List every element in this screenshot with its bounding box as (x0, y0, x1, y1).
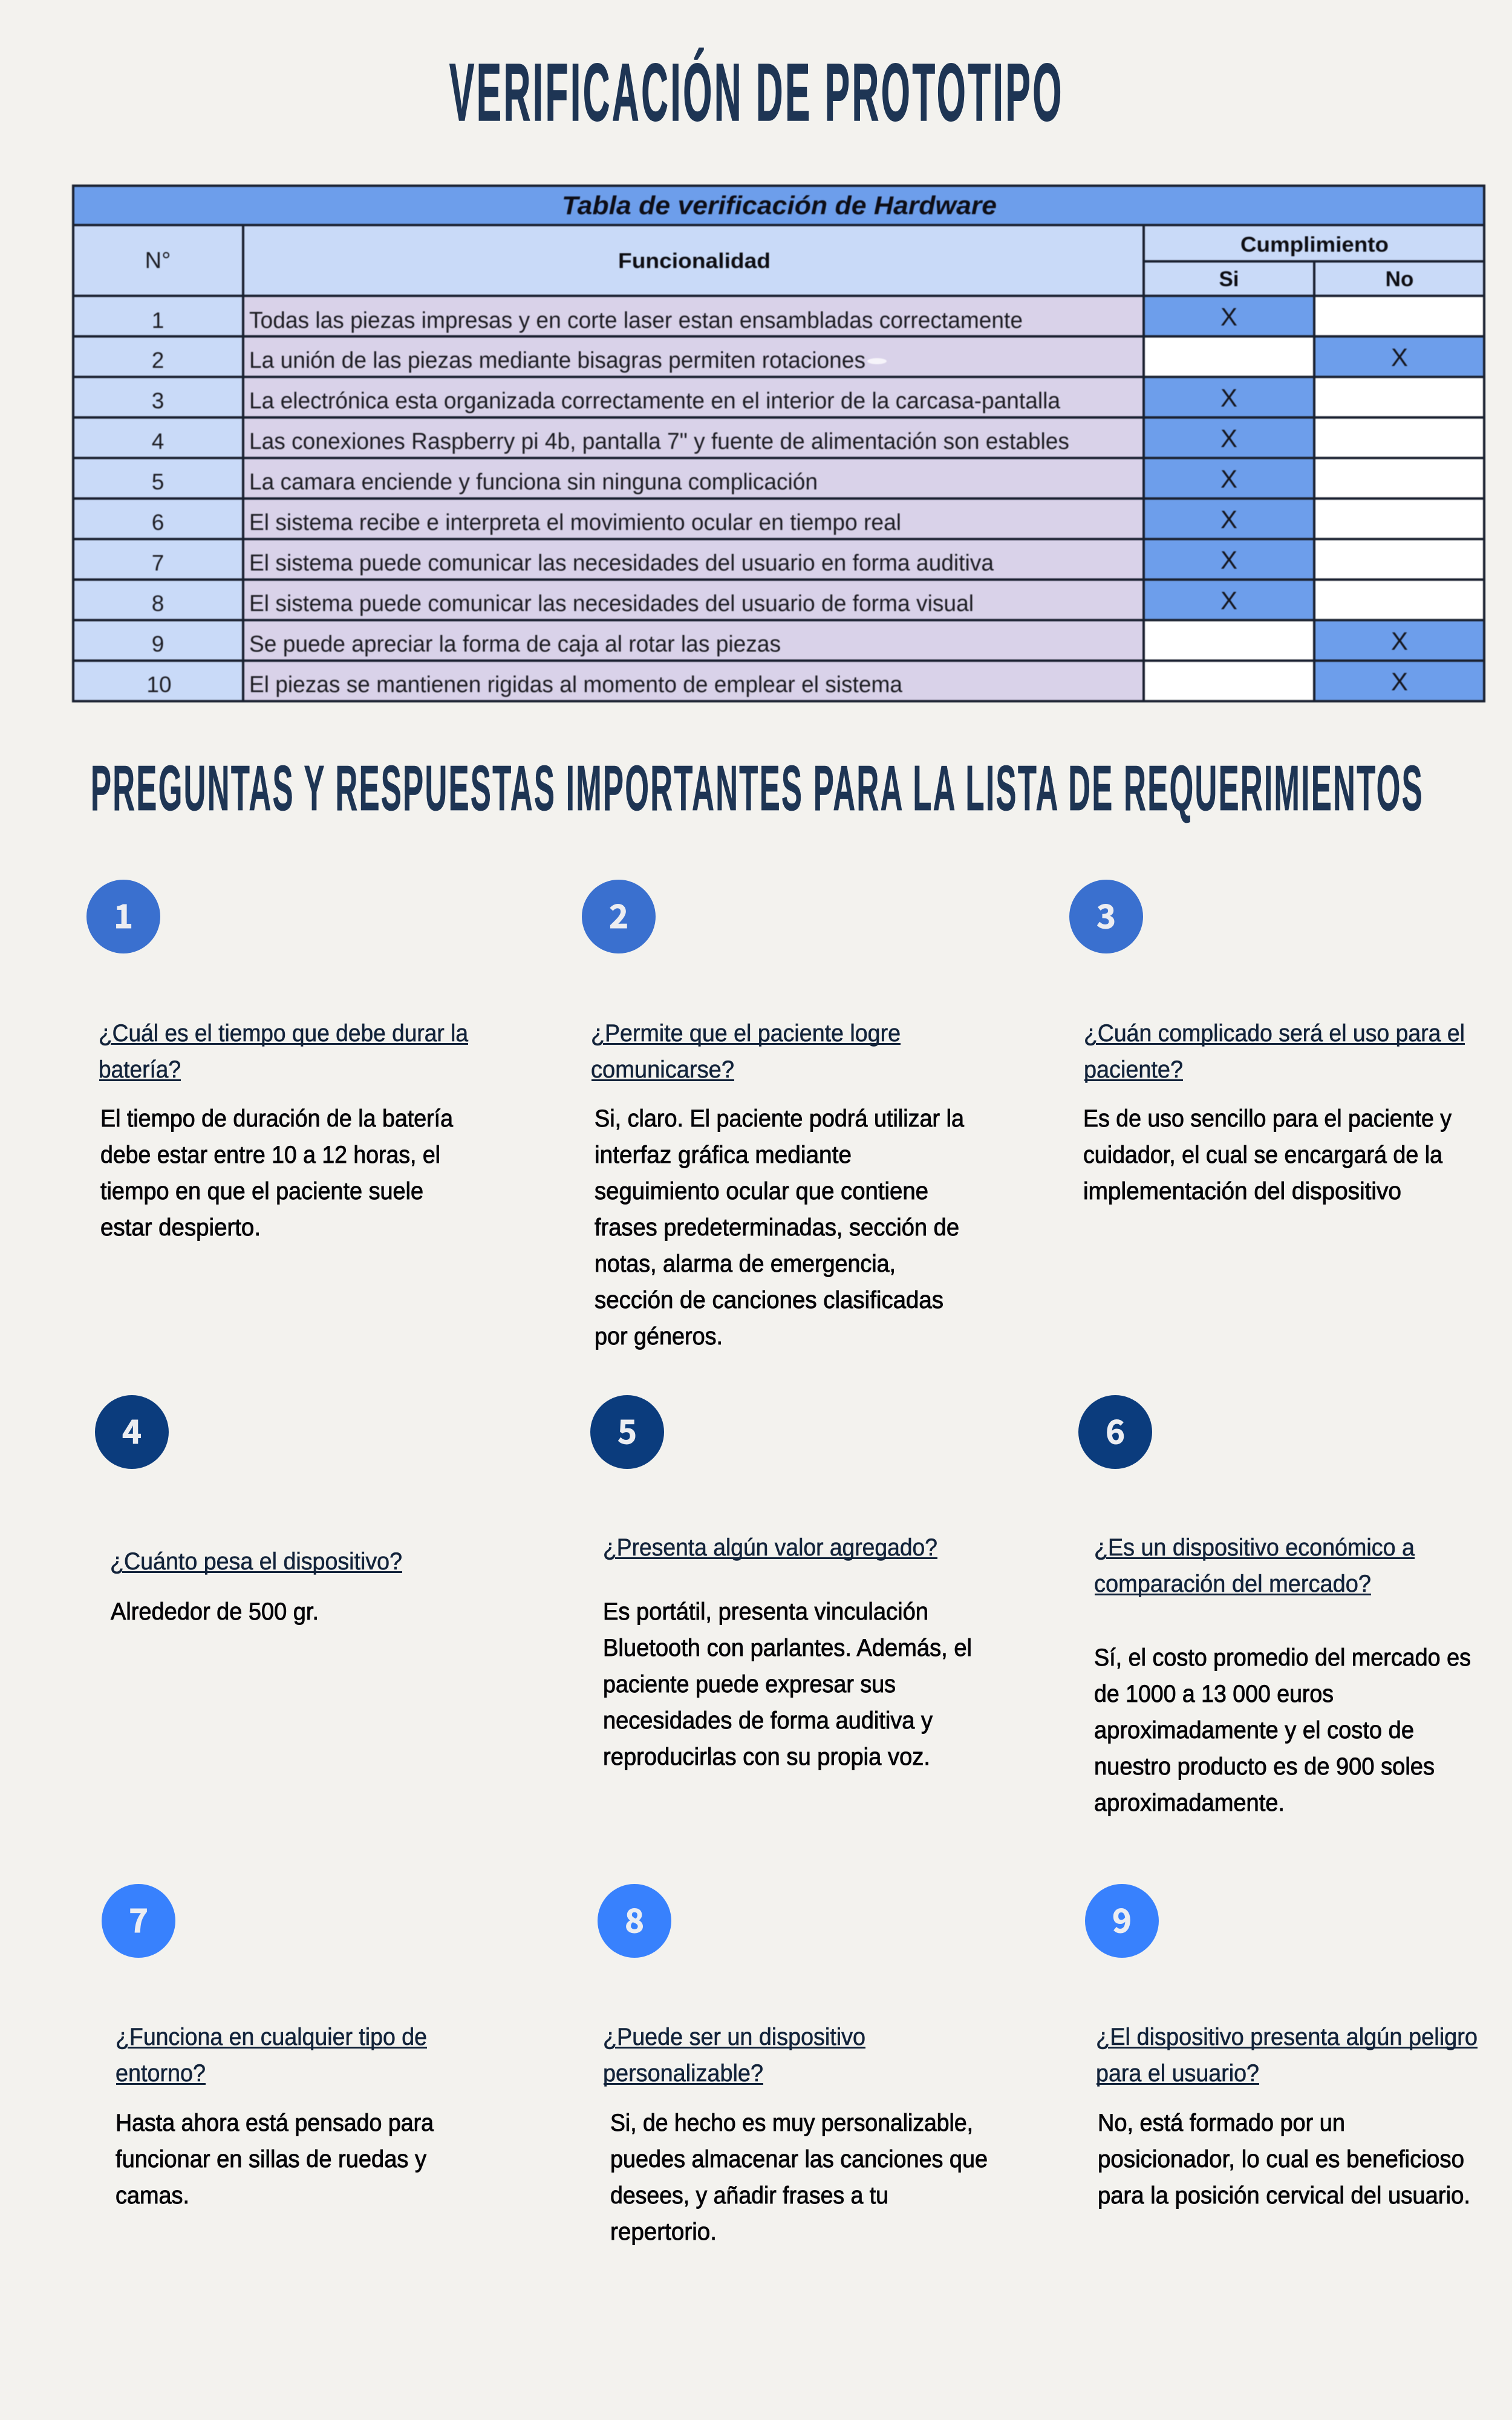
row 3: X (1220, 384, 1237, 412)
question 9: para el usuario? (1096, 2060, 1259, 2087)
question 5: ¿Presenta algún valor agregado? (603, 1534, 937, 1561)
row 9: 9 (152, 632, 164, 656)
question 8: personalizable? (603, 2060, 763, 2087)
row 5: X (1220, 465, 1237, 493)
answer 5: Es portátil, presenta vinculación (603, 1598, 928, 1625)
row 10: X (1391, 667, 1408, 696)
answer 5 (603, 1598, 972, 1770)
question 7 (116, 2024, 427, 2087)
number badge 1: 1 (114, 890, 133, 938)
number badge 7 (102, 1884, 175, 1958)
row 5 (73, 458, 1484, 499)
question 3 (1084, 1020, 1465, 1083)
table title bar: Tabla de verificación de Hardware (562, 191, 997, 220)
row 3: 3 (152, 388, 164, 413)
table header row: Cumplimiento (1240, 233, 1389, 257)
answer 2: seguimiento ocular que contiene (595, 1178, 928, 1205)
answer 6 (1094, 1644, 1471, 1816)
row 2: X (1391, 343, 1408, 371)
answer 1: El tiempo de duración de la batería (100, 1105, 454, 1132)
panel: question 6 (1078, 1395, 1471, 1816)
answer 7 (116, 2110, 434, 2209)
row 7 (73, 539, 1484, 580)
panel: question 1 (86, 880, 469, 1241)
answer 8: desees, y añadir frases a tu (610, 2182, 888, 2209)
table header row: Si (1219, 267, 1239, 291)
row 2: La unión de las piezas mediante bisagras permiten rotaciones (249, 348, 865, 373)
table header row: Funcionalidad (618, 249, 771, 273)
row 8 (73, 580, 1484, 620)
number badge 6 (1078, 1395, 1152, 1469)
number badge 6: 6 (1106, 1405, 1125, 1453)
question 8 (603, 2024, 865, 2087)
panel: question 5 (590, 1395, 972, 1770)
answer 2: por géneros. (595, 1323, 723, 1350)
row 8: X (1220, 586, 1237, 615)
number badge 7: 7 (129, 1894, 148, 1942)
answer 8 (610, 2110, 988, 2245)
answer 1 (100, 1105, 454, 1241)
answer 2: interfaz gráfica mediante (595, 1142, 852, 1168)
answer 6: aproximadamente y el costo de (1094, 1717, 1414, 1744)
answer 2: notas, alarma de emergencia, (595, 1251, 896, 1277)
row 5: La camara enciende y funciona sin ninguna complicación (249, 469, 818, 495)
row 5: 5 (152, 469, 164, 494)
question 1 (99, 1020, 469, 1083)
row 1 (73, 296, 1484, 336)
question 7: ¿Funciona en cualquier tipo de (116, 2024, 427, 2050)
row 4: 4 (152, 429, 164, 454)
panel: question 7 (102, 1884, 434, 2209)
row 4: Las conexiones Raspberry pi 4b, pantalla 7" y fuente de alimentación son estables (249, 429, 1069, 454)
number badge 9 (1085, 1884, 1159, 1958)
row 9: X (1391, 627, 1408, 655)
row 8: El sistema puede comunicar las necesidades del usuario de forma visual (249, 591, 974, 616)
row 3: La electrónica esta organizada correctamente en el interior de la carcasa-pantalla (249, 388, 1061, 414)
table title bar (73, 186, 1484, 225)
panel: question 8 (598, 1884, 988, 2245)
question 2: comunicarse? (591, 1056, 734, 1083)
table header row: N° (145, 248, 171, 273)
question 6 (1094, 1534, 1415, 1597)
row 6: X (1220, 505, 1237, 534)
table header row: No (1386, 267, 1413, 291)
question 4: ¿Cuánto pesa el dispositivo? (110, 1548, 402, 1575)
row 10: 10 (146, 672, 172, 697)
answer 2 (595, 1105, 965, 1350)
number badge 3 (1069, 880, 1143, 953)
row 7: X (1220, 546, 1237, 574)
answer 9: No, está formado por un (1098, 2110, 1345, 2136)
row 9: Se puede apreciar la forma de caja al rotar las piezas (249, 632, 781, 657)
panel: question 4 (95, 1395, 402, 1625)
table header row (73, 225, 1484, 296)
question 7: entorno? (116, 2060, 206, 2087)
question 9 (1096, 2024, 1478, 2087)
row 6: 6 (152, 510, 164, 535)
answer 2: frases predeterminadas, sección de (595, 1214, 959, 1241)
answer 5: Bluetooth con parlantes. Además, el (603, 1635, 972, 1661)
answer 9: posicionador, lo cual es beneficioso (1098, 2146, 1464, 2173)
panel: question 9 (1085, 1884, 1478, 2209)
answer 6: aproximadamente. (1094, 1790, 1285, 1816)
question 9: ¿El dispositivo presenta algún peligro (1096, 2024, 1478, 2050)
panel: question 3 (1069, 880, 1465, 1205)
number badge 4 (95, 1395, 169, 1469)
row 10: El piezas se mantienen rigidas al momento de emplear el sistema (249, 672, 903, 698)
question 8: ¿Puede ser un dispositivo (603, 2024, 865, 2050)
answer 7: funcionar en sillas de ruedas y (116, 2146, 426, 2173)
answer 8: Si, de hecho es muy personalizable, (610, 2110, 973, 2136)
answer 5: reproducirlas con su propia voz. (603, 1744, 930, 1770)
answer 5: necesidades de forma auditiva y (603, 1707, 933, 1734)
question 6: comparación del mercado? (1094, 1571, 1371, 1597)
answer 3: Es de uso sencillo para el paciente y (1083, 1105, 1452, 1132)
answer 9 (1098, 2110, 1470, 2209)
number badge 2 (582, 880, 656, 953)
number badge 9: 9 (1112, 1894, 1132, 1942)
answer 3: implementación del dispositivo (1083, 1178, 1401, 1205)
answer 1: debe estar entre 10 a 12 horas, el (100, 1142, 440, 1168)
row 1: Todas las piezas impresas y en corte laser estan ensambladas correctamente (249, 308, 1023, 333)
row 9 (73, 620, 1484, 661)
row 3 (73, 377, 1484, 417)
number badge 1 (86, 880, 160, 953)
answer 6: Sí, el costo promedio del mercado es (1094, 1644, 1471, 1671)
row 6: El sistema recibe e interpreta el movimiento ocular en tiempo real (249, 510, 901, 535)
row 10 (73, 661, 1484, 701)
answer 4: Alrededor de 500 gr. (111, 1598, 319, 1625)
row 2 (73, 336, 1484, 377)
question 2: ¿Permite que el paciente logre (591, 1020, 901, 1047)
answer 6: de 1000 a 13 000 euros (1094, 1681, 1334, 1707)
number badge 5 (590, 1395, 664, 1469)
answer 3: cuidador, el cual se encargará de la (1083, 1142, 1443, 1168)
question 2 (591, 1020, 901, 1083)
question 6: ¿Es un dispositivo económico a (1094, 1534, 1415, 1561)
row 4 (73, 417, 1484, 458)
answer 2: sección de canciones clasificadas (595, 1287, 943, 1313)
answer 6: nuestro producto es de 900 soles (1094, 1753, 1435, 1780)
answer 8: puedes almacenar las canciones que (610, 2146, 988, 2173)
question 3: ¿Cuán complicado será el uso para el (1084, 1020, 1465, 1047)
answer 9: para la posición cervical del usuario. (1098, 2182, 1470, 2209)
row 8: 8 (152, 591, 164, 616)
number badge 8: 8 (625, 1894, 644, 1942)
question 3: paciente? (1084, 1056, 1183, 1083)
answer 5: paciente puede expresar sus (603, 1671, 896, 1698)
answer 2: Si, claro. El paciente podrá utilizar la (595, 1105, 965, 1132)
row 1: X (1220, 302, 1237, 331)
question 1: batería? (99, 1056, 181, 1083)
number badge 5: 5 (618, 1405, 637, 1453)
answer 1: tiempo en que el paciente suele (100, 1178, 423, 1205)
row 6 (73, 499, 1484, 539)
row 7: El sistema puede comunicar las necesidades del usuario en forma auditiva (249, 551, 994, 576)
row 1: 1 (152, 308, 164, 333)
row 7: 7 (152, 551, 164, 575)
answer 1: estar despierto. (100, 1214, 261, 1241)
answer 7: Hasta ahora está pensado para (116, 2110, 434, 2136)
answer 7: camas. (116, 2182, 189, 2209)
row 4: X (1220, 424, 1237, 453)
number badge 3: 3 (1097, 890, 1116, 938)
question 1: ¿Cuál es el tiempo que debe durar la (99, 1020, 469, 1047)
number badge 8 (598, 1884, 671, 1958)
number badge 4: 4 (122, 1405, 142, 1453)
row 2: 2 (152, 348, 164, 373)
answer 8: repertorio. (610, 2219, 717, 2245)
panel: question 2 (582, 880, 965, 1350)
number badge 2: 2 (609, 890, 628, 938)
answer 3 (1083, 1105, 1452, 1205)
panel: hardware verification table (73, 186, 1484, 701)
